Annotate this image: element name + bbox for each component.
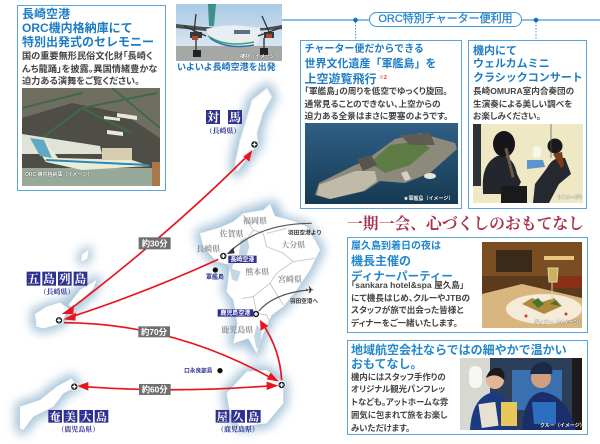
map drawing in enlarged coordinates (20, 150, 322, 433)
body text: 「sankara hotel&spa 屋久島」 (351, 280, 464, 290)
body text: 「軍艦島」の周りを低空でゆっくり旋回。 (304, 86, 448, 96)
island name Goto Retto: 列 (59, 272, 71, 286)
airport and place labels: 口永良部島 (184, 366, 213, 374)
panel heading (473, 44, 583, 84)
island name Yakushima: 屋 (217, 409, 228, 423)
panel: Gunkanjima sightseeing flight (300, 40, 462, 209)
body text: 通常見ることのできない、上空からの (304, 99, 441, 109)
panel heading (304, 43, 436, 86)
prefecture names (196, 216, 306, 334)
note mark: ※2 (379, 75, 387, 81)
inland seas and bays (227, 237, 262, 349)
connecting flights from Haneda (230, 223, 312, 312)
airport markers (55, 252, 285, 390)
body text (351, 372, 448, 433)
panel heading: 機長主催の (351, 254, 411, 268)
island glow (20, 88, 320, 430)
caption: departing from Nagasaki Airport: いよいよ長崎空港を出発 (177, 62, 276, 72)
body text: みいただけます。 (351, 423, 410, 433)
island of Goto (35, 250, 97, 328)
panel heading: チャーター便だからできる (304, 44, 424, 54)
panel heading (22, 7, 154, 49)
panel heading: ウェルカムミニ (473, 58, 550, 70)
body text: スタッフが旅で出会った皆様と (351, 305, 464, 315)
panel heading: 特別出発式のセレモニー (22, 35, 154, 49)
panel heading: 上空遊覧飛行 (304, 72, 377, 86)
flight time labels (138, 237, 171, 395)
airport and place labels: 鹿児島空港 (220, 309, 250, 317)
map drawing in enlarged coordinates: 羽田空港へ (290, 297, 318, 305)
body text: お楽しみください。 (473, 111, 541, 121)
map drawing in enlarged coordinates: 羽田空港より (288, 228, 322, 236)
panel heading: 機内にて (473, 44, 517, 56)
airport and place labels (184, 255, 257, 374)
island name Tsushima: 対 (207, 110, 219, 124)
photo caption: ★軍艦島（イメージ） (404, 196, 453, 202)
island name Yakushima (216, 409, 261, 433)
body text: トなども。アットホームな雰 (351, 397, 448, 407)
body text: んち龍踊」を披露。異国情緒豊かな (22, 64, 157, 74)
prefecture borders (242, 215, 315, 327)
island name Amami Oshima: 島 (96, 409, 107, 423)
body text: 迫力ある全景はまさに要塞のようです。 (304, 111, 448, 121)
airport marker Tsushima (251, 141, 258, 148)
panel heading: 長崎空港 (22, 7, 70, 21)
panel heading: おもてなし。 (351, 357, 423, 371)
body text: 囲気に包まれて旅をお楽し (351, 410, 447, 420)
body text: 機内にはスタッフ手作りの (351, 372, 446, 382)
island name Yakushima: 島 (248, 409, 259, 423)
photo: Gunkanjima island (305, 123, 458, 204)
body text: 国の重要無形民俗文化財「長崎く (22, 51, 153, 61)
map drawing in enlarged coordinates: ✈ (306, 285, 314, 296)
island name Goto Retto (27, 272, 87, 296)
island of Kyushu (200, 204, 320, 353)
photo caption: ORC 機内格納庫（イメージ） (25, 172, 92, 178)
panel: captain's dinner party (347, 237, 588, 333)
island name Yakushima: 久 (232, 409, 243, 423)
island of Yakushima (227, 370, 283, 427)
panel heading: 世界文化遺産「軍艦島」を (304, 58, 436, 70)
arrowheads (62, 150, 279, 391)
prefecture names: 長崎県 (196, 243, 221, 253)
photo: cabin crew with pamphlets (460, 358, 582, 430)
airport and place labels: 軍艦島 (206, 273, 224, 281)
photo: musicians on board (473, 124, 583, 203)
prefecture names: 福岡県 (243, 216, 268, 226)
heading: once-in-a-lifetime hospitality: 一期一会、心づくしのおもてなし (347, 216, 584, 233)
body text: 迫力ある演舞をご覧ください。 (22, 76, 140, 86)
photo: departing aircraft at Nagasaki (176, 4, 282, 61)
panel: warm regional airline hospitality (347, 340, 588, 435)
island name Goto Retto: 島 (74, 272, 86, 286)
island name Goto Retto: 島 (43, 272, 55, 286)
panel: welcome mini classical concert (468, 40, 587, 209)
island name Amami Oshima: 奄 (49, 409, 60, 423)
flight time labels: 約30分 (142, 239, 168, 249)
island of Amami (20, 378, 77, 430)
flight time labels: 約60分 (142, 385, 168, 395)
photo: plane in hangar (22, 88, 160, 186)
panel heading (351, 343, 567, 371)
body text: ディナーをご一緒いたします。 (351, 318, 458, 328)
panel: Nagasaki airport ceremony (17, 5, 166, 191)
island name Yakushima: （鹿児島県） (217, 424, 259, 433)
panel heading: ORC機内格納庫にて (22, 21, 133, 35)
body text (22, 51, 157, 86)
body text: 生演奏による美しい調べを (473, 99, 572, 109)
island name Goto Retto: 五 (27, 273, 39, 286)
prefecture names: 大分県 (281, 240, 306, 250)
panel heading (351, 240, 453, 282)
banner: ORC charter flight: ORC特別チャーター便利用 (378, 13, 513, 25)
island name Amami Oshima: （鹿児島県） (57, 424, 99, 433)
body text: オリジナル観光パンフレッ (351, 384, 445, 394)
panel heading: クラシックコンサート (473, 72, 583, 84)
photo: dinner table (482, 242, 582, 328)
panel heading: ディナーパーティー (351, 270, 453, 282)
prefecture names: 佐賀県 (220, 229, 245, 239)
prefecture names: 鹿児島県 (221, 324, 254, 334)
island name Tsushima: 馬 (229, 110, 241, 124)
island name Amami Oshima (48, 409, 108, 433)
body text: にて機長はじめ、クルーやJTBの (351, 293, 470, 303)
connector lines to charter banner (282, 18, 600, 38)
island name Tsushima (206, 110, 242, 135)
prefecture names: 宮崎県 (278, 274, 303, 284)
panel heading: 地域航空会社ならではの細やかで温かい (351, 343, 567, 357)
body text (351, 280, 470, 328)
airport and place labels: 長崎空港 (230, 255, 254, 263)
island of Tsushima (235, 88, 272, 172)
panel heading: 屋久島到着日の夜は (351, 240, 441, 252)
prefecture names: 熊本県 (245, 267, 270, 277)
island name Goto Retto: （長崎県） (40, 287, 74, 296)
photo caption: 機材（イメージ） (240, 54, 280, 60)
flight time labels: 約70分 (141, 327, 168, 337)
island name Amami Oshima: 美 (65, 409, 76, 423)
body text (473, 86, 574, 121)
body text: 長崎OMURA室内合奏団の (473, 86, 574, 96)
island name Amami Oshima: 大 (80, 409, 91, 423)
island name Tsushima: （長崎県） (206, 126, 240, 135)
red flight routes (64, 155, 282, 390)
body text (304, 86, 448, 121)
